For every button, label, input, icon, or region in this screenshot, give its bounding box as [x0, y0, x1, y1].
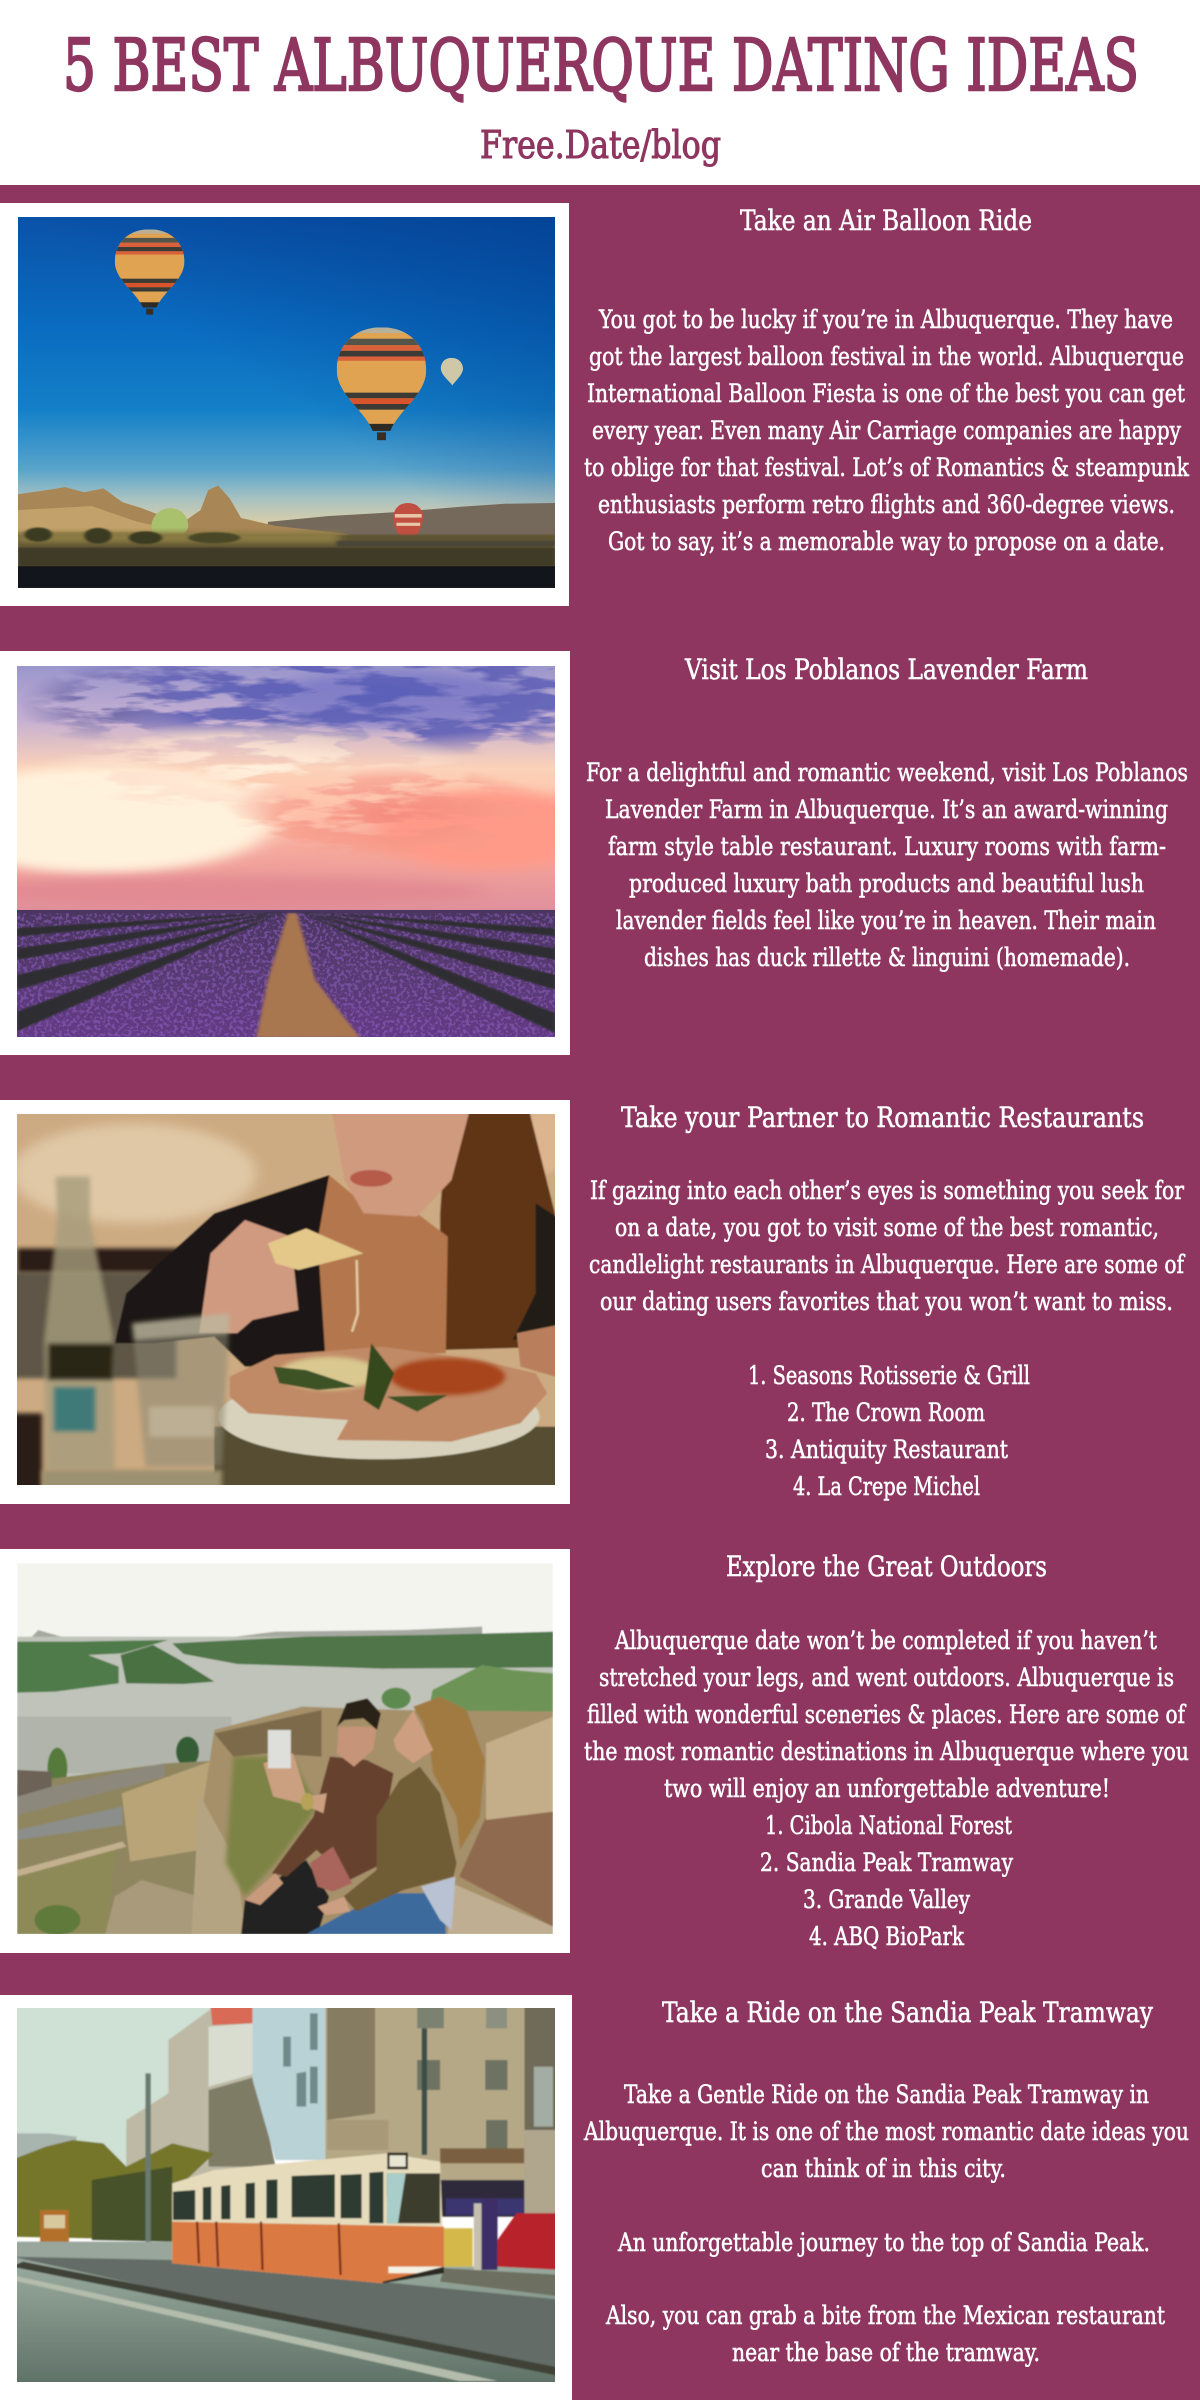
skyline: [32, 1626, 483, 1638]
pavement: [440, 2268, 563, 2297]
woman: jacket: [343, 1767, 457, 1912]
section 4 destination list: [760, 1811, 1014, 1951]
storefront: [440, 2180, 524, 2217]
icon: small balloon: [441, 358, 463, 386]
trees: [11, 2140, 214, 2240]
road: [11, 2267, 563, 2390]
green balloon on ground: [152, 508, 188, 534]
section 3 body text: [589, 1176, 1185, 1316]
section 4 body text: [584, 1626, 1189, 1803]
section 3 restaurant list: 4. La Crepe Michel: [793, 1472, 980, 1501]
pink clouds: [86, 721, 444, 810]
woman: hand: [318, 1897, 350, 1915]
wall: [8, 1107, 566, 1493]
woman: hair: [413, 1697, 485, 1850]
dark foreground corner: [17, 1410, 46, 1485]
section 4 body text: two will enjoy an unforgettable adventure!: [664, 1774, 1110, 1803]
sky: [11, 2003, 218, 2177]
section 3 restaurant list: [748, 1361, 1030, 1501]
phone: [268, 1730, 291, 1768]
drinking glass: [132, 1313, 230, 1467]
woman: shirt: [421, 1877, 455, 1930]
man: trousers: [241, 1860, 329, 1934]
section 4 destination list: 1. Cibola National Forest: [765, 1811, 1012, 1840]
subtitle: Free.Date/blog: [480, 123, 721, 167]
man: arm and hand: [263, 1753, 327, 1813]
woman: face: [393, 1710, 433, 1763]
icon: balloon two: [337, 327, 426, 440]
tram windows: [173, 2172, 383, 2223]
mid buildings: [126, 2003, 253, 2180]
woman: jeans: [306, 1893, 446, 1934]
section 4 destination list: 3. Grande Valley: [803, 1885, 971, 1914]
section 2 body text: [586, 758, 1188, 972]
distant mountains: [268, 503, 556, 542]
red van: [498, 2213, 563, 2270]
black top: [115, 1175, 344, 1367]
far right building: [524, 2003, 563, 2217]
route number sign: [387, 2153, 408, 2169]
man: shirt: [310, 1847, 352, 1892]
section 1 heading: Take an Air Balloon Ride: [740, 204, 1032, 237]
dirt slope: [17, 1842, 126, 1877]
section 4 heading: Explore the Great Outdoors: [726, 1550, 1047, 1583]
river: [17, 1637, 553, 1777]
brick wall right: [459, 1812, 553, 1927]
table: [214, 1426, 555, 1485]
far forest: [172, 1632, 553, 1669]
stone wall: [122, 1760, 214, 1862]
section 2 heading: Visit Los Poblanos Lavender Farm: [684, 653, 1088, 686]
panel: lavender farm photo: [0, 651, 605, 1055]
right bushes: [429, 1665, 553, 1712]
tan stone building: [325, 2003, 524, 2217]
panel: restaurant photo: [0, 1100, 570, 1504]
street lamp: [145, 2073, 151, 2247]
man: jacket: [272, 1757, 393, 1880]
purple clouds: [260, 672, 536, 728]
glass bottle: [44, 1177, 115, 1470]
plain foreground: [18, 535, 556, 570]
small tram: [40, 2210, 69, 2247]
riverbank buildings: [17, 1770, 52, 1797]
panel: outdoors selfie photo: [0, 1549, 570, 1953]
section 1 body text: [584, 305, 1190, 556]
plate: [218, 1398, 540, 1460]
road: [17, 1807, 122, 1840]
lavender field: [17, 910, 556, 1037]
kiosk: [474, 2203, 482, 2270]
rock formations: [18, 486, 352, 554]
tram: [172, 2153, 444, 2283]
skin: chest and neck: [318, 1175, 448, 1357]
slice of pizza: [268, 1228, 364, 1270]
section 3 restaurant list: 2. The Crown Room: [787, 1398, 985, 1427]
red balloon low: [393, 503, 424, 536]
hand: [199, 1220, 299, 1333]
lower hillside base: [17, 1760, 447, 1934]
panel: tramway photo: [0, 1995, 572, 2400]
pizza: [230, 1347, 547, 1442]
tram doors: [197, 2222, 341, 2275]
section 4 destination list: 4. ABQ BioPark: [809, 1922, 965, 1951]
road: [18, 566, 556, 588]
man: head: [337, 1727, 377, 1767]
face: [331, 1107, 471, 1217]
section 5 body text: can think of in this city.: [761, 2154, 1006, 2183]
section 4 destination list: 2. Sandia Peak Tramway: [760, 1848, 1014, 1877]
section 5 body text: near the base of the tramway.: [732, 2338, 1040, 2367]
island: [121, 1645, 214, 1684]
header band: [0, 0, 1200, 185]
section 3 restaurant list: 1. Seasons Rotisserie & Grill: [748, 1361, 1030, 1390]
sky: [17, 1563, 553, 1637]
road far: [11, 2242, 172, 2268]
icon: balloon one: [115, 229, 184, 315]
yellow car: [444, 2228, 473, 2267]
section 5 body text: [583, 2080, 1189, 2367]
sofa band: [17, 1244, 179, 1274]
hair: [439, 1114, 555, 1351]
dirt path: [256, 913, 360, 1037]
section 3 restaurant list: 3. Antiquity Restaurant: [765, 1435, 1008, 1464]
panel: air balloon photo: [0, 203, 569, 606]
left building: [11, 2133, 77, 2167]
sky glow: [0, 767, 276, 873]
basil: [274, 1367, 356, 1390]
